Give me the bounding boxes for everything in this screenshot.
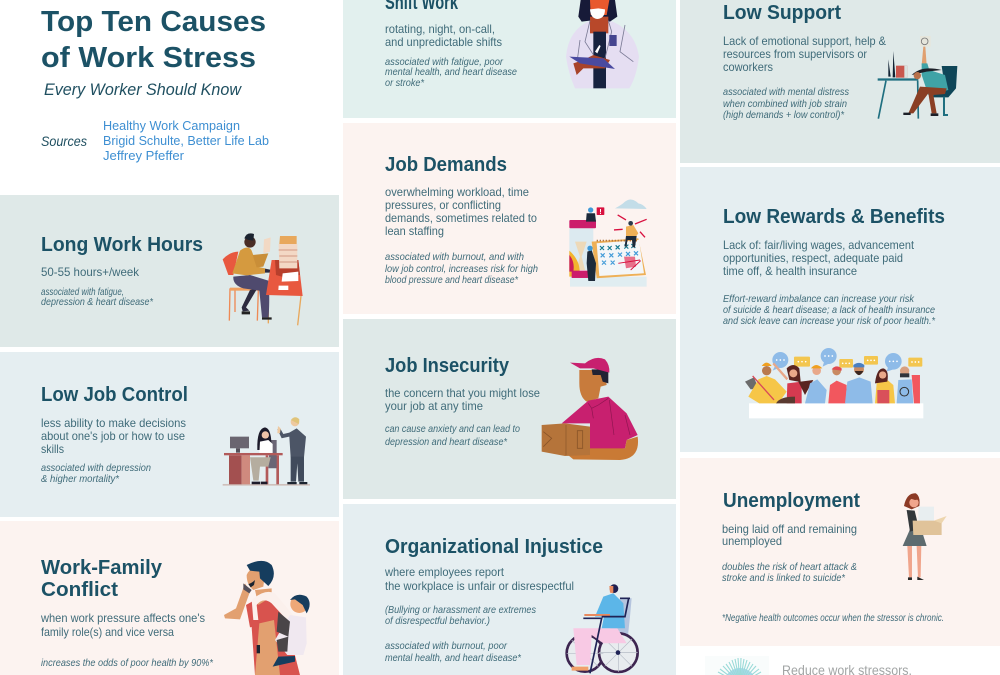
text: low rewards description: of suicide & heart disease; a lack of health insurance [723, 305, 935, 316]
footnote: *Negative health outcomes occur when the stressor is chronic. [722, 613, 944, 624]
heading: job demands: Job Demands [385, 154, 507, 176]
panel: shift work [343, 0, 676, 118]
heading: low rewards and benefits: Low Rewards & Benefits [723, 206, 945, 228]
text: low job control description: & higher mortality* [41, 474, 120, 485]
sources: Sources [41, 133, 87, 149]
text: low job control description: less ability to make decisions [41, 416, 186, 430]
text: low rewards description: and sick leave can increase your risk of poor health.* [723, 316, 936, 327]
text: shift work description: associated with fatigue, poor [385, 57, 504, 68]
icon: exhausted worker slumped at desk [878, 36, 957, 119]
text: organizational injustice description: mental health, and heart disease* [385, 653, 522, 664]
icon: person in wheelchair [567, 584, 638, 673]
panel: work-family conflict [0, 521, 339, 675]
text: unemployment description: stroke and is linked to suicide* [722, 573, 846, 584]
text: low support description: associated with mental distress [723, 87, 849, 98]
panel: low job control [0, 352, 339, 517]
text: low support description [723, 34, 886, 121]
text: low job control description [41, 416, 186, 485]
heading: low job control: Low Job Control [41, 384, 188, 406]
text: long work hours description: 50-55 hours+/week [41, 265, 139, 279]
text: shift work description [385, 22, 517, 89]
text: job insecurity description [385, 386, 540, 448]
text: shift work description: rotating, night, on-call, [385, 22, 495, 36]
text: organizational injustice description: the workplace is unfair or disrespectful [385, 579, 574, 593]
sources: Brigid Schulte, Better Life Lab [103, 133, 269, 148]
panel: job insecurity [343, 319, 676, 499]
panel: low rewards and benefits [680, 167, 1000, 452]
icon: laid-off woman carrying box [903, 493, 947, 580]
icon: delivery worker holding box [542, 358, 638, 460]
title block [41, 6, 266, 74]
icon: hourglass and calendar with workers [569, 200, 647, 287]
sources [41, 118, 269, 163]
text: low support description: when combined with job strain [723, 99, 847, 110]
text: low support description: coworkers [723, 60, 773, 74]
panel: organizational injustice [343, 504, 676, 675]
text: long work hours description: depression & heart disease* [41, 297, 154, 308]
panel: job demands [343, 123, 676, 314]
text: job demands description: low job control, increases risk for high [385, 264, 538, 275]
heading: work-family conflict [41, 557, 163, 601]
text: job demands description: blood pressure and heart disease* [385, 275, 519, 286]
text: low rewards description [723, 238, 936, 327]
text: work-family description: when work pressure affects one's [40, 611, 205, 625]
text: unemployment description: unemployed [722, 534, 782, 548]
text: job demands description: associated with burnout, and with [385, 252, 524, 263]
text: work-family description [40, 611, 214, 669]
subtitle: Every Worker Should Know [44, 80, 243, 99]
heading: work-family conflict: Conflict [41, 579, 118, 601]
sources: Jeffrey Pfeffer [103, 148, 185, 163]
icon: group of workers with speech bubbles [745, 348, 923, 418]
heading: low support: Low Support [723, 2, 841, 24]
text: job insecurity description: your job at any time [385, 399, 483, 413]
text: job demands description: pressures, or conflicting [385, 198, 501, 212]
icon: health worker with mask and clipboard [566, 0, 639, 88]
text: long work hours description: associated with fatigue, [41, 287, 124, 298]
heading: long work hours: Long Work Hours [41, 234, 203, 256]
text: shift work description: mental health, and heart disease [385, 67, 517, 78]
text: low support description: Lack of emotional support, help & [723, 34, 886, 48]
text: low rewards description: Lack of: fair/living wages, advancement [723, 238, 915, 252]
text: work-family description: increases the odds of poor health by 90%* [41, 658, 214, 669]
title block: Top Ten Causes [41, 6, 266, 38]
text: low rewards description: opportunities, respect, adequate paid [723, 251, 903, 265]
text: organizational injustice description: (Bullying or harassment are extremes [385, 605, 536, 616]
text: job demands description: demands, sometimes related to [385, 211, 537, 225]
text: long work hours description [41, 265, 154, 308]
text: organizational injustice description: of disrespectful behavior.) [385, 616, 490, 627]
panel: long work hours [0, 195, 339, 347]
text: shift work description: and unpredictable shifts [385, 35, 502, 49]
heading: unemployment: Unemployment [723, 490, 860, 512]
text: job insecurity description: the concern that you might lose [385, 386, 540, 400]
title block: of Work Stress [41, 42, 256, 74]
text: low job control description: associated with depression [41, 463, 151, 474]
footer: reduce work stressors [680, 646, 1000, 675]
text: low support description: (high demands + low control)* [723, 110, 845, 121]
text: low rewards description: Effort-reward imbalance can increase your risk [723, 294, 915, 305]
text: organizational injustice description: where employees report [384, 565, 505, 579]
text: low job control description: skills [41, 442, 64, 456]
text: shift work description: or stroke* [385, 78, 425, 89]
text: low job control description: about one's job or how to use [41, 429, 185, 443]
sources: Healthy Work Campaign [103, 118, 240, 133]
text: job insecurity description: depression and heart disease* [385, 437, 508, 448]
text: organizational injustice description [384, 565, 574, 664]
text: job demands description [385, 185, 538, 286]
icon: woman at desk with manager [223, 417, 310, 486]
panel: low support [680, 0, 1000, 163]
text: organizational injustice description: associated with burnout, poor [385, 641, 508, 652]
text: unemployment description [722, 522, 857, 584]
text: job insecurity description: can cause anxiety and can lead to [385, 424, 520, 435]
text: job demands description: lean staffing [385, 224, 444, 238]
panel: unemployment [680, 458, 1000, 646]
icon: sunburst [705, 656, 769, 675]
text: unemployment description: being laid off and remaining [722, 522, 857, 536]
text: work-family description: family role(s) and vice versa [41, 625, 174, 639]
heading: job insecurity: Job Insecurity [385, 355, 510, 377]
text: low rewards description: time off, & health insurance [723, 264, 857, 278]
text: unemployment description: doubles the risk of heart attack & [722, 562, 857, 573]
heading: work-family conflict: Work-Family [41, 557, 163, 579]
icon: father on phone carrying baby [224, 561, 310, 675]
text: low support description: resources from supervisors or [723, 47, 867, 61]
text: job demands description: overwhelming workload, time [385, 185, 529, 199]
heading: organizational injustice: Organizational Injustice [385, 536, 603, 558]
icon: man at desk with paper stack [223, 233, 303, 325]
